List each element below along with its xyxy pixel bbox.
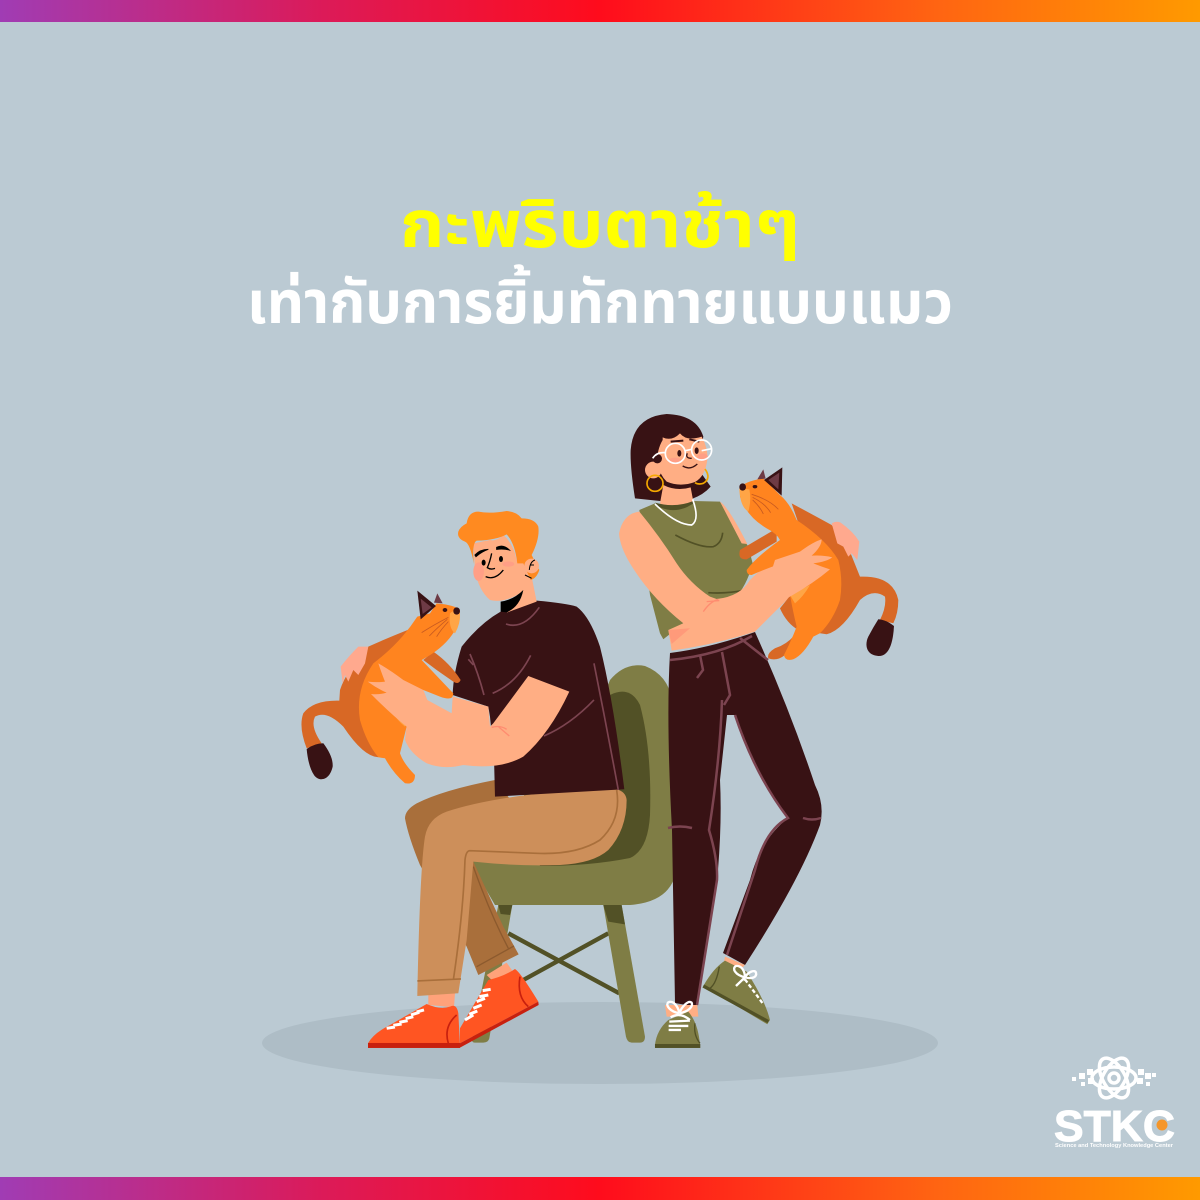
woman arm and stomach [720,502,747,544]
man head [473,535,537,613]
trousers [405,780,527,975]
woman hair [631,414,711,501]
title [247,187,953,336]
title: กะพริบตาช้าๆ [400,187,800,261]
woman legs and shoes [655,632,822,1048]
woman [619,414,822,1048]
logo wordmark: STKC [1054,1102,1175,1151]
logo caption: Science and Technology Knowledge Center [1055,1143,1174,1149]
cat held by man [301,591,569,784]
title: เท่ากับการยิ้มทักทายแบบแมว [247,264,953,336]
logo squares [1072,1069,1156,1086]
STKC logo [1054,1053,1175,1151]
woman head [660,485,693,509]
man arm [368,663,569,767]
man shirt [453,601,624,797]
ground shadow [262,1002,938,1084]
bottom gradient bar [0,1177,1200,1200]
logo atom icon [1092,1053,1136,1103]
chair [470,665,676,1043]
man hand on cat back [341,647,368,683]
woman top [639,501,753,639]
man [368,780,627,1048]
woman hand on cat back [832,522,859,560]
top gradient bar [0,0,1200,22]
woman fingers front [767,539,832,607]
red shoes [460,969,538,1043]
cat held by woman [739,467,898,660]
